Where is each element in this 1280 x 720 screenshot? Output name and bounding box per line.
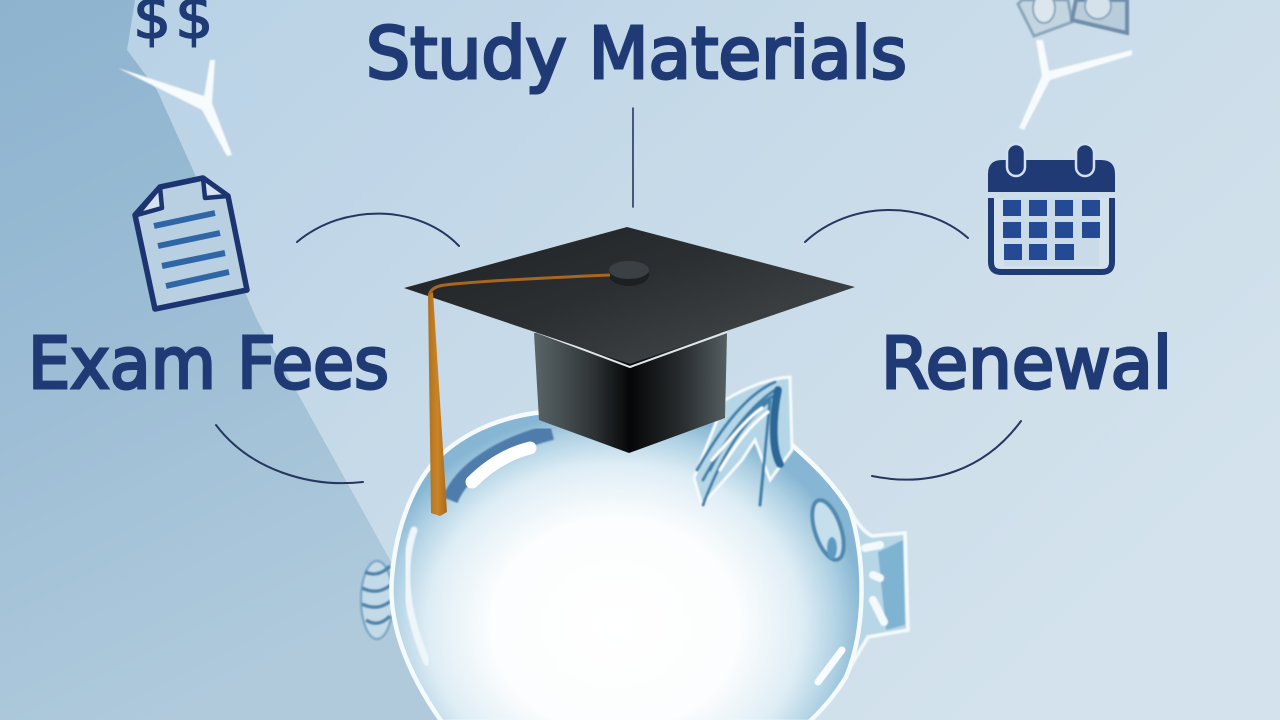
icon: calendar (988, 144, 1115, 272)
pig lower highlight (818, 650, 842, 682)
icon: document (135, 178, 247, 309)
title: Study Materials: Study Materials (366, 12, 907, 95)
cap base (534, 333, 727, 453)
tassel cord (429, 275, 610, 296)
piggy bank (361, 377, 908, 720)
white Y connector right (1019, 40, 1132, 130)
pig left rim (407, 530, 427, 662)
button (609, 261, 649, 286)
tassel (428, 292, 447, 516)
label: Exam Fees: Exam Fees (28, 322, 389, 405)
icon: banknotes (1018, 0, 1127, 36)
pig upper highlight band (450, 432, 552, 500)
graduation cap (404, 227, 855, 516)
connector lines (216, 108, 1021, 483)
pig white highlight (472, 448, 530, 482)
pig body (391, 400, 862, 720)
shadow wedge (0, 0, 500, 720)
mortarboard (404, 227, 855, 364)
pig eye (806, 497, 850, 564)
pig ear (694, 377, 792, 505)
mortarboard underside edge (534, 331, 727, 367)
label: Renewal: Renewal (881, 322, 1172, 405)
pig snout (846, 510, 908, 674)
pig tail (361, 561, 393, 639)
white Y connector left (118, 60, 232, 156)
